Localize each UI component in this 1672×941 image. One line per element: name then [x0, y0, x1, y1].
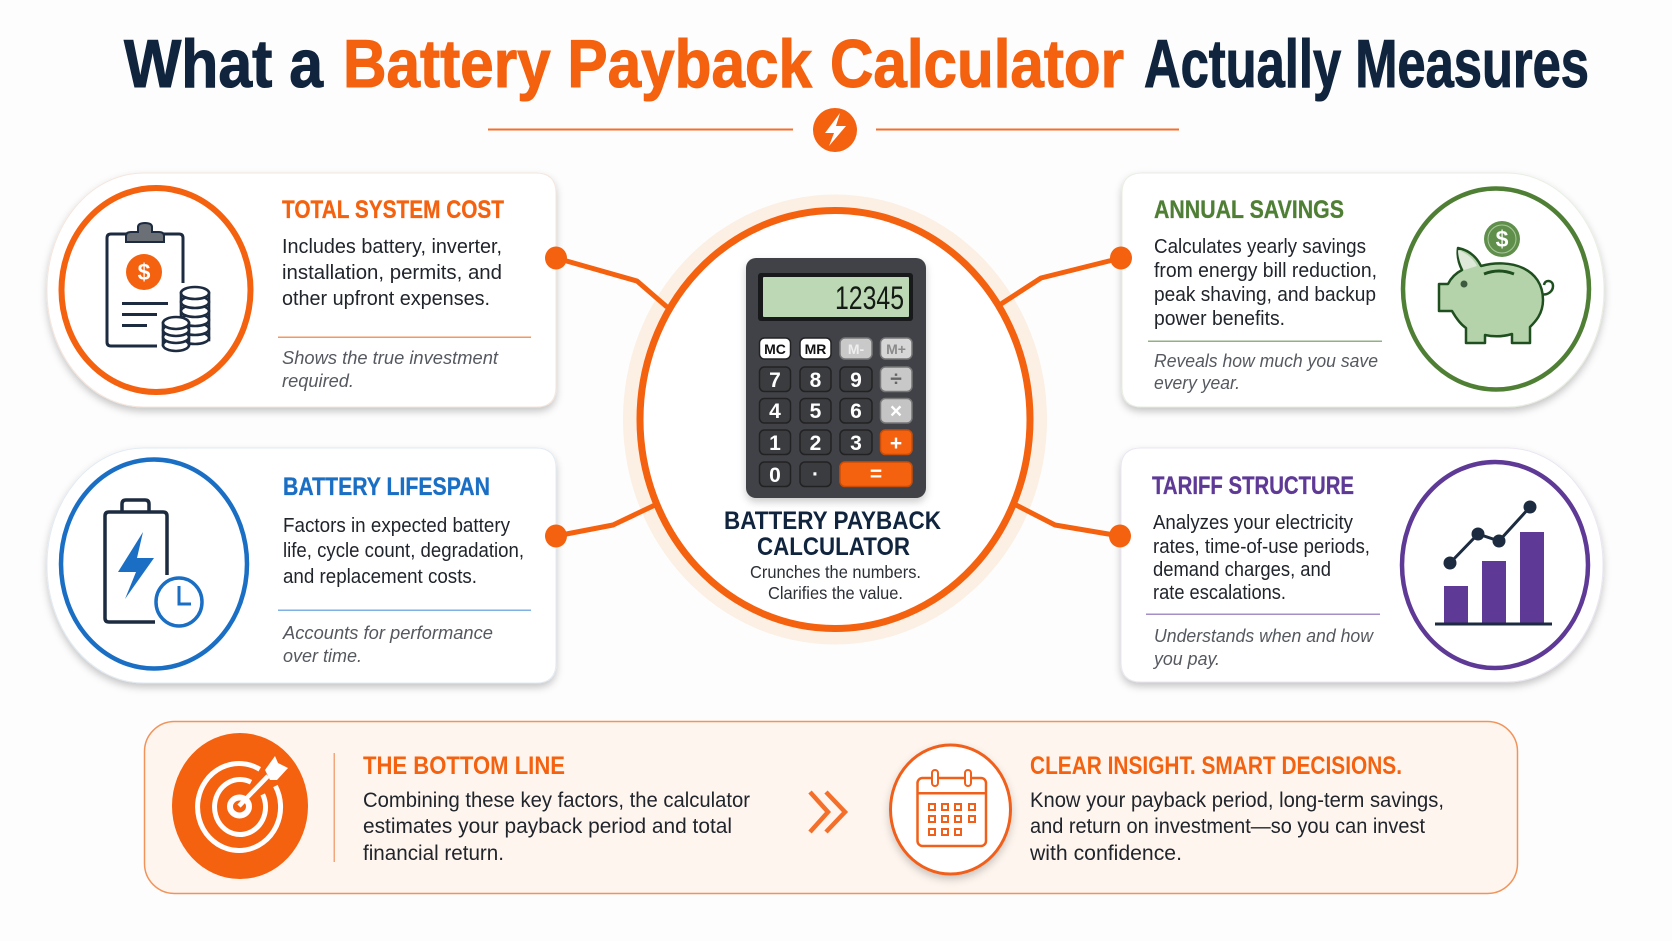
- center subtitle: Clarifies the value.: [768, 583, 903, 603]
- icon: calculator: 1: [769, 432, 781, 455]
- panel: tariff structure: [1121, 448, 1603, 682]
- icon: bar chart with trend line: [1435, 500, 1552, 626]
- icon: calculator: 7: [769, 369, 781, 392]
- note: required.: [282, 370, 354, 391]
- body text: [282, 236, 502, 310]
- panel: annual savings: [1122, 173, 1604, 407]
- title: What a: [124, 26, 324, 102]
- icon: calculator: [746, 258, 926, 498]
- center title: [724, 507, 941, 561]
- note: Accounts for performance: [282, 622, 493, 643]
- connectors: [556, 258, 1121, 536]
- icon: battery with clock: [105, 500, 202, 626]
- icon: clipboard with coins: [107, 223, 209, 351]
- icon: piggy bank with coin: [1439, 221, 1553, 343]
- icon: calculator: ·: [812, 463, 819, 486]
- icon: calculator: MR: [805, 341, 826, 357]
- body text: rates, time-of-use periods,: [1153, 536, 1370, 558]
- note: every year.: [1154, 372, 1240, 393]
- icon: clipboard with coins: $: [138, 259, 151, 285]
- body text: [1153, 512, 1370, 604]
- body text: Includes battery, inverter,: [282, 236, 502, 258]
- icon: calculator: 12345: [835, 280, 904, 316]
- connector dots: [545, 246, 1132, 548]
- center subtitle: Crunches the numbers.: [750, 562, 921, 582]
- icon: piggy bank with coin: $: [1496, 226, 1509, 252]
- icon: calculator: 3: [850, 432, 862, 455]
- icon: calculator: 8: [810, 369, 822, 392]
- center subtitle: [750, 562, 921, 603]
- body text: installation, permits, and: [282, 262, 502, 284]
- note: [282, 347, 499, 391]
- title: Battery Payback: [343, 26, 812, 102]
- panel: battery lifespan: [47, 448, 556, 683]
- body text: and return on investment—so you can invest: [1030, 814, 1425, 838]
- title: [124, 26, 1589, 102]
- icon: calculator: M-: [848, 341, 864, 357]
- body text: other upfront expenses.: [282, 288, 490, 310]
- center title: BATTERY PAYBACK: [724, 507, 941, 535]
- body text: [1029, 788, 1444, 865]
- heading: BATTERY LIFESPAN: [283, 473, 490, 501]
- icon: calculator: =: [870, 463, 882, 486]
- icon: calculator: 2: [810, 432, 821, 455]
- heading: THE BOTTOM LINE: [363, 752, 565, 780]
- title: Calculator: [830, 26, 1124, 102]
- body text: Combining these key factors, the calculator: [363, 788, 750, 812]
- arrow: chevrons: [810, 792, 845, 832]
- body text: and replacement costs.: [283, 566, 477, 588]
- icon: calculator: ×: [890, 400, 902, 423]
- center circle: battery payback calculator: [623, 195, 1047, 645]
- note: [1154, 350, 1378, 393]
- body text: life, cycle count, degradation,: [283, 540, 524, 562]
- note: over time.: [283, 645, 362, 666]
- icon: calculator: M+: [886, 341, 906, 357]
- body text: power benefits.: [1154, 308, 1285, 330]
- body text: peak shaving, and backup: [1154, 284, 1376, 306]
- panel: bottom line: [144, 722, 1518, 894]
- body text: [283, 515, 524, 588]
- icon: calculator: 9: [850, 369, 862, 392]
- icon: calendar: [890, 745, 1010, 874]
- icon: target with arrow: [172, 733, 308, 879]
- heading: ANNUAL SAVINGS: [1154, 196, 1344, 224]
- body text: rate escalations.: [1153, 582, 1286, 604]
- body text: demand charges, and: [1153, 559, 1331, 581]
- icon: calculator: 6: [850, 400, 862, 423]
- body text: [363, 788, 750, 865]
- note: [282, 622, 493, 666]
- body text: [1154, 236, 1377, 330]
- note: Understands when and how: [1154, 625, 1375, 646]
- note: [1152, 625, 1375, 669]
- body text: Factors in expected battery: [283, 515, 510, 537]
- note: Reveals how much you save: [1154, 350, 1378, 371]
- icon: calculator: ÷: [890, 368, 902, 391]
- panel: total system cost: [47, 173, 556, 407]
- center title: CALCULATOR: [757, 533, 910, 561]
- icon: calculator: 4: [769, 400, 781, 423]
- icon: calculator: 5: [810, 400, 822, 423]
- body text: estimates your payback period and total: [363, 814, 732, 838]
- note: you pay.: [1152, 648, 1220, 669]
- title divider with bolt icon: [488, 108, 1179, 152]
- body text: from energy bill reduction,: [1154, 260, 1377, 282]
- note: Shows the true investment: [282, 347, 499, 368]
- heading: CLEAR INSIGHT. SMART DECISIONS.: [1030, 752, 1402, 780]
- icon: calculator: +: [890, 432, 902, 455]
- heading: TOTAL SYSTEM COST: [282, 196, 504, 224]
- body text: Analyzes your electricity: [1153, 512, 1353, 534]
- icon: calculator: 0: [769, 464, 781, 487]
- body text: financial return.: [363, 841, 504, 865]
- body text: with confidence.: [1029, 841, 1182, 865]
- body text: Calculates yearly savings: [1154, 236, 1366, 258]
- icon: calculator: MC: [764, 341, 786, 357]
- heading: TARIFF STRUCTURE: [1152, 472, 1354, 500]
- body text: Know your payback period, long-term savings,: [1030, 788, 1444, 812]
